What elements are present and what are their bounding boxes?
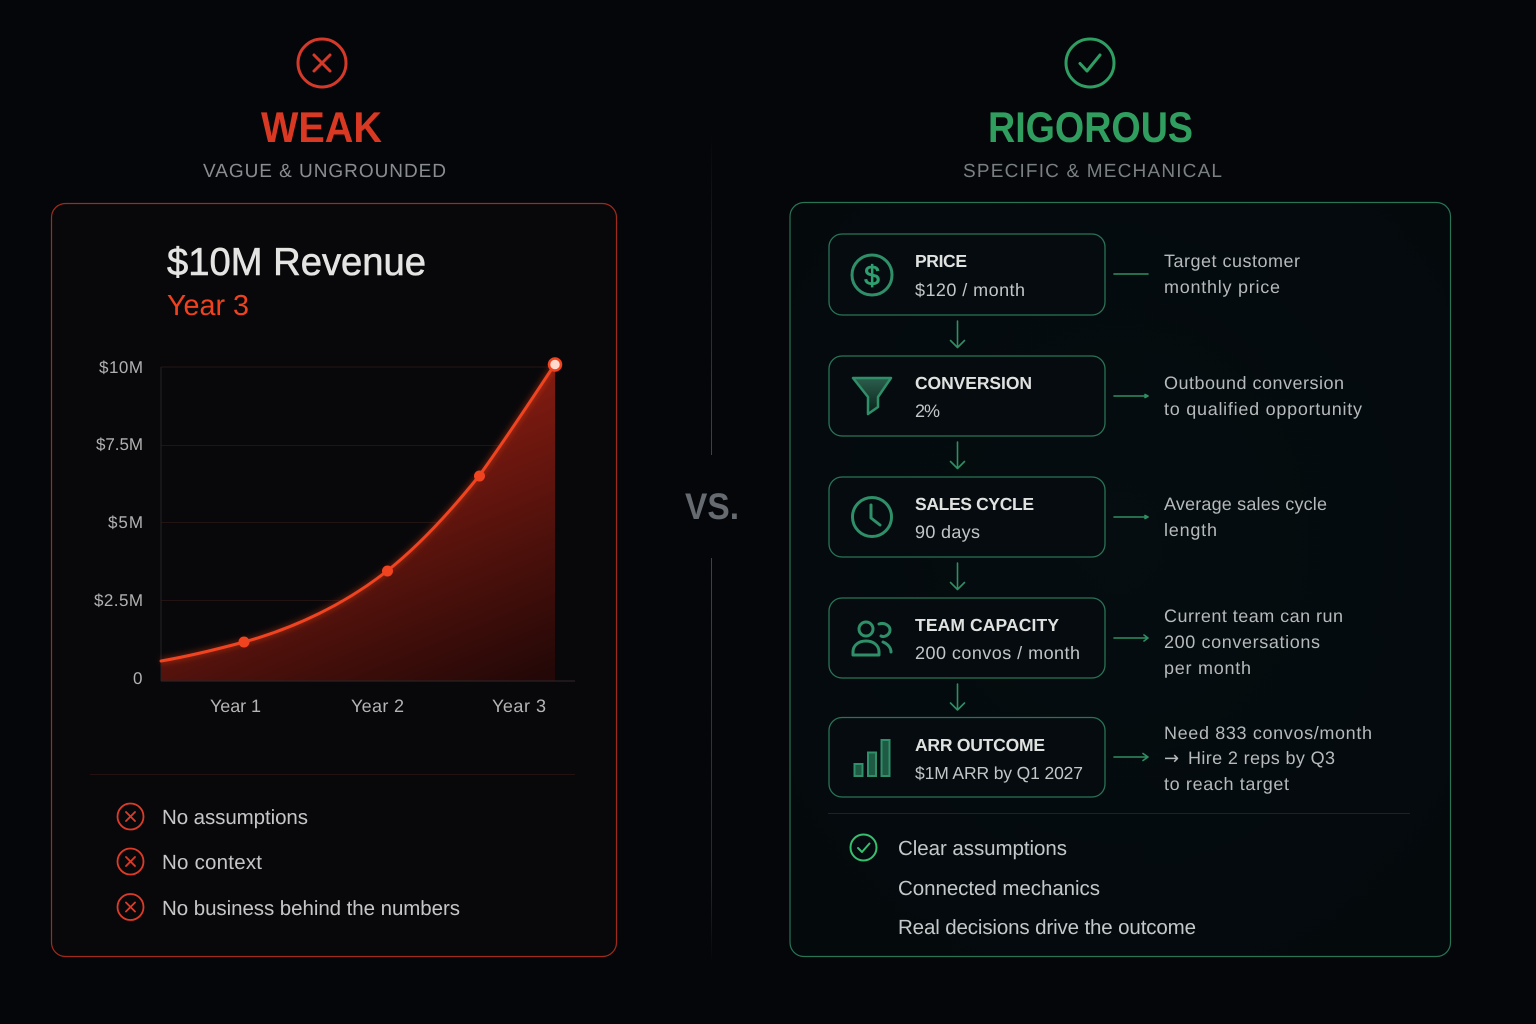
note: conversion (1164, 373, 1362, 419)
icon: dollar coin (852, 255, 892, 295)
team capacity text: TEAM CAPACITY (915, 615, 1059, 635)
note: sales cycle: Average sales cycle (1164, 494, 1327, 514)
note: arr outcome: Hire 2 reps by Q3 (1188, 748, 1335, 768)
heading: weak: WEAK (261, 104, 382, 152)
note: team capacity (1164, 606, 1343, 678)
team capacity text (915, 615, 1080, 663)
list: weaknesses: No business behind the numbers (162, 897, 460, 920)
connector: price (1114, 273, 1148, 275)
header: weak (203, 39, 446, 182)
connector: sales cycle (1114, 516, 1148, 518)
arrow: team capacity to arr outcome (950, 684, 964, 710)
icon: funnel (853, 378, 891, 414)
icon: bars (854, 740, 890, 776)
chart title: $10M Revenue (167, 241, 426, 284)
connector: team capacity (1114, 635, 1148, 641)
icon: people (853, 622, 891, 655)
subheading: specific and mechanical: SPECIFIC & MECHANICAL (963, 161, 1222, 182)
y axis labels: 0 (133, 669, 142, 688)
panel: rigorous (790, 202, 1450, 956)
line chart: revenue curve (161, 358, 575, 681)
arr outcome text: $1M ARR by Q1 2027 (915, 763, 1083, 783)
note: arr outcome: → (1164, 748, 1179, 769)
note: conversion: Outbound conversion (1164, 373, 1344, 393)
conversion text (915, 373, 1032, 421)
icon: clock (852, 498, 892, 536)
panel: weak (52, 204, 616, 956)
price text (915, 251, 1025, 300)
step: arr outcome (829, 718, 1105, 797)
connector: conversion (1114, 394, 1148, 398)
price text: PRICE (915, 251, 967, 271)
conversion text: CONVERSION (915, 373, 1032, 393)
conversion text: 2% (915, 401, 940, 421)
note: arr outcome (1164, 723, 1372, 794)
note: conversion: to qualified opportunity (1164, 399, 1362, 419)
chart subtitle: Year 3 (167, 290, 249, 322)
list: strengths (850, 834, 1196, 939)
sales cycle text: SALES CYCLE (915, 494, 1034, 514)
arr outcome text: ARR OUTCOME (915, 735, 1045, 755)
x axis labels: Year 1 (210, 696, 261, 716)
y axis labels: $10M (99, 358, 143, 377)
heading: rigorous: RIGOROUS (988, 104, 1193, 152)
y axis labels: $2.5M (94, 591, 143, 610)
step: team capacity (829, 598, 1105, 678)
x axis labels (210, 696, 546, 716)
list: weaknesses (118, 804, 460, 920)
y axis labels: $5M (108, 513, 143, 532)
price text: $120 / month (915, 280, 1025, 300)
step: sales cycle (829, 477, 1105, 557)
arr outcome text (915, 735, 1083, 783)
y axis labels (94, 358, 143, 688)
header: rigorous (963, 39, 1222, 182)
arrow: sales cycle to team capacity (950, 563, 964, 590)
x axis labels: Year 2 (351, 696, 404, 716)
y axis labels: $7.5M (96, 435, 143, 454)
note: arr outcome: to reach target (1164, 774, 1289, 794)
step: price (829, 234, 1105, 315)
list: strengths: Clear assumptions (898, 837, 1067, 860)
vs label: VS. (685, 486, 739, 527)
note: team capacity: Current team can run (1164, 606, 1343, 626)
list: strengths: Real decisions drive the outcome (898, 916, 1196, 939)
subheading: vague and ungrounded: VAGUE & UNGROUNDED (203, 161, 446, 182)
list: strengths: Connected mechanics (898, 877, 1100, 900)
sales cycle text: 90 days (915, 522, 980, 542)
team capacity text: 200 convos / month (915, 643, 1080, 663)
connector: arr outcome (1114, 754, 1148, 760)
arrow: price to conversion (950, 321, 964, 348)
list: weaknesses: No context (162, 851, 262, 874)
list: weaknesses: No assumptions (162, 806, 308, 829)
note: sales cycle: length (1164, 520, 1217, 540)
note: arr outcome: Need 833 convos/month (1164, 723, 1372, 743)
icon: red x in circle (298, 39, 346, 87)
note: sales cycle (1164, 494, 1327, 540)
icon: dollar coin: $ (864, 260, 880, 291)
note: team capacity: per month (1164, 658, 1251, 678)
arrow: conversion to sales cycle (950, 442, 964, 468)
note: team capacity: 200 conversations (1164, 632, 1320, 652)
step: conversion (829, 356, 1105, 436)
note: price: Target customer (1164, 251, 1300, 271)
icon: green check in circle (1066, 39, 1114, 87)
note: price (1164, 251, 1300, 297)
x axis labels: Year 3 (492, 696, 546, 716)
sales cycle text (915, 494, 1034, 542)
note: price: monthly price (1164, 277, 1280, 297)
